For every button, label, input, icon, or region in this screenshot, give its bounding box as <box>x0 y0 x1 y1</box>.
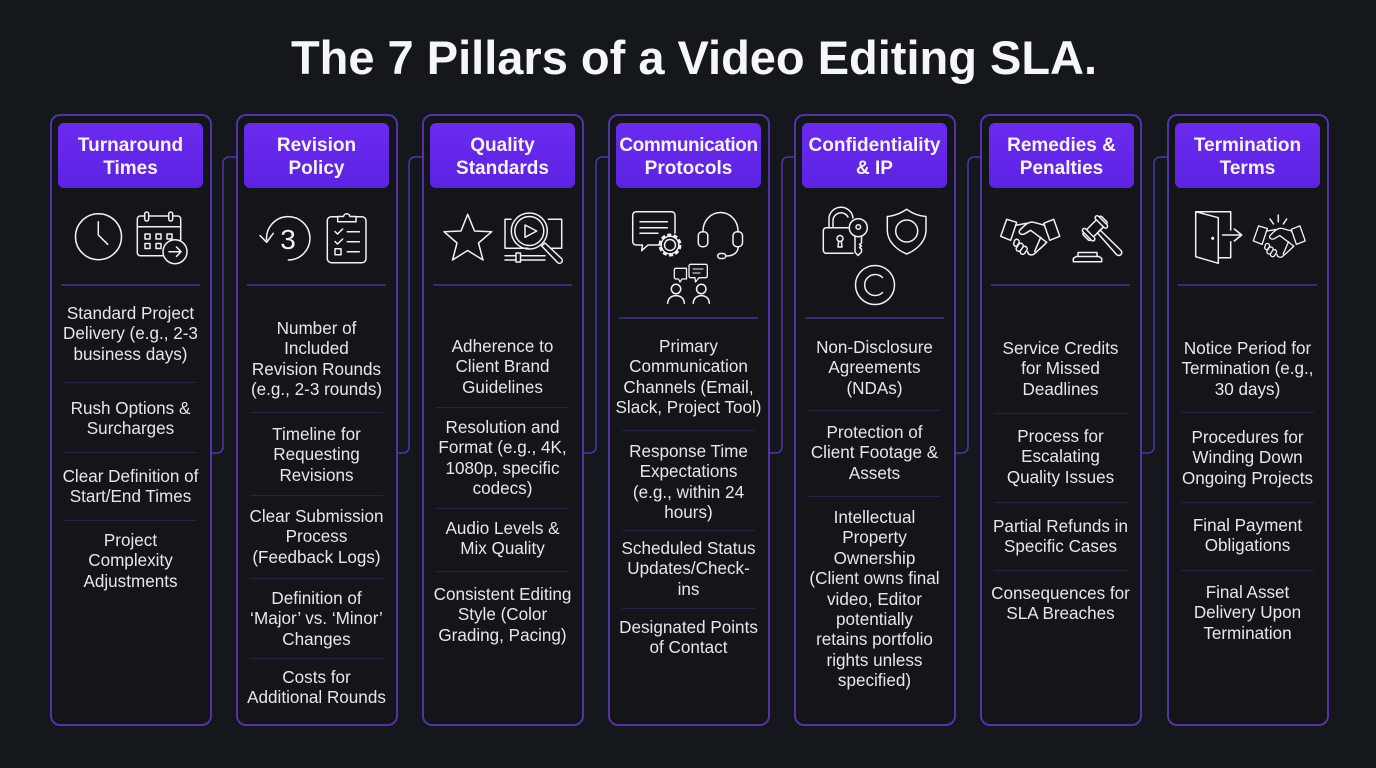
icon: gavel <box>1073 213 1122 262</box>
text: included rounds <box>251 319 382 399</box>
text: submission process: Clear Submission <box>250 507 383 526</box>
text: NDAs: (NDAs) <box>846 379 903 398</box>
text: final asset delivery <box>1194 583 1301 643</box>
text: IP ownership: specified) <box>838 671 911 690</box>
text: winding down: Ongoing Projects <box>1182 469 1313 488</box>
text: standard delivery: business days) <box>73 345 188 364</box>
text: notice period: 30 days) <box>1215 380 1280 399</box>
text: service credits <box>1003 339 1118 399</box>
text: final asset delivery: Termination <box>1203 624 1292 643</box>
text: points of contact: Designated Points <box>619 618 758 637</box>
heading: Remedies & Penalties: Remedies & <box>1007 135 1116 156</box>
panel: Communication Protocols <box>608 114 770 726</box>
heading: Quality Standards: Quality <box>470 135 535 156</box>
heading: Remedies & Penalties: Penalties <box>1020 158 1103 179</box>
text: final asset delivery: Final Asset <box>1206 583 1289 602</box>
text: complexity adjustments <box>83 531 178 591</box>
text: brand guidelines <box>452 337 553 397</box>
text: resolution and format: Resolution and <box>445 418 560 437</box>
text: final asset delivery: Delivery Upon <box>1194 603 1301 622</box>
text: NDAs: Non-Disclosure <box>816 338 933 357</box>
text: channels: Slack, Project Tool) <box>616 398 762 417</box>
icon: chat bubble with gear <box>633 212 680 255</box>
text: editing style: Style (Color <box>458 605 547 624</box>
heading: Termination Terms: Termination <box>1194 135 1301 156</box>
icons: star and video magnifier <box>443 212 563 264</box>
text: audio <box>445 519 560 558</box>
icon: clipboard checklist <box>327 214 366 263</box>
panel: Termination Terms <box>1167 114 1329 726</box>
icons: handshake and gavel <box>1000 215 1122 262</box>
icons: lock, shield, copyright <box>822 206 927 306</box>
title: The 7 Pillars of a Video Editing SLA. <box>291 31 1097 84</box>
text: timeline: Timeline for <box>272 425 361 444</box>
text: consequences <box>991 584 1130 623</box>
text: channels: Primary <box>659 337 718 356</box>
panel: Quality Standards <box>422 114 584 726</box>
heading: Confidentiality & IP: Confidentiality <box>809 135 940 156</box>
text: standard delivery: Delivery (e.g., 2-3 <box>63 324 198 343</box>
heading: Quality Standards: Standards <box>456 158 549 179</box>
text: footage protection <box>811 423 938 483</box>
text: IP ownership: Property <box>842 528 907 547</box>
text: escalation: Escalating <box>1021 447 1100 466</box>
text: final payment: Obligations <box>1205 536 1290 555</box>
heading: Revision Policy: Policy <box>288 158 344 179</box>
text: escalation: Process for <box>1017 427 1104 446</box>
text: resolution and format: codecs) <box>473 479 532 498</box>
text: brand guidelines: Adherence to <box>452 337 553 356</box>
text: response time: hours) <box>664 503 713 522</box>
text: status updates: Updates/Check- <box>627 559 750 578</box>
text: submission process <box>250 507 383 567</box>
heading: Termination Terms <box>1175 123 1320 188</box>
text: IP ownership: video, Editor <box>827 590 922 609</box>
text: major vs minor <box>250 589 383 649</box>
panel: Remedies & Penalties <box>980 114 1142 726</box>
text: notice period: Termination (e.g., <box>1181 359 1314 378</box>
text: winding down <box>1182 428 1313 488</box>
text: response time: (e.g., within 24 <box>633 483 744 502</box>
text: included rounds: Number of <box>277 319 356 338</box>
text: final payment <box>1193 516 1302 555</box>
text: channels: Communication <box>629 357 748 376</box>
text: footage protection: Client Footage & <box>811 443 938 462</box>
text: NDAs <box>816 338 933 398</box>
text: complexity adjustments: Adjustments <box>83 572 178 591</box>
text: resolution and format <box>438 418 567 498</box>
text: partial refunds: Partial Refunds in <box>993 517 1128 536</box>
icon: headset <box>698 212 742 258</box>
text: timeline: Requesting <box>273 445 360 464</box>
text: start and end times: Clear Definition of <box>63 467 198 486</box>
text: points of contact <box>619 618 758 657</box>
panel: Turnaround Times <box>50 114 212 726</box>
text: winding down: Procedures for <box>1191 428 1304 447</box>
text: IP ownership: retains portfolio <box>816 630 933 649</box>
text: brand guidelines: Guidelines <box>462 378 543 397</box>
text: response time: Expectations <box>640 462 737 481</box>
text: escalation: Quality Issues <box>1007 468 1114 487</box>
text: escalation <box>1007 427 1114 487</box>
text: submission process: (Feedback Logs) <box>252 548 381 567</box>
text: IP ownership <box>809 508 940 690</box>
text: standard delivery: Standard Project <box>67 304 194 323</box>
text: resolution and format: 1080p, specific <box>445 459 560 478</box>
text: costs: Additional Rounds <box>247 688 386 707</box>
icon: door with arrow <box>1196 212 1242 263</box>
text: final payment: Final Payment <box>1193 516 1302 535</box>
icon: handshake with sparkle <box>1253 215 1305 257</box>
text: rush options <box>71 399 190 438</box>
heading: Confidentiality & IP <box>802 123 947 188</box>
text: costs <box>247 668 386 707</box>
text: major vs minor: ‘Major’ vs. ‘Minor’ <box>250 609 383 628</box>
icon: clock <box>76 214 122 260</box>
icons: clock and calendar <box>74 211 188 264</box>
text: partial refunds: Specific Cases <box>1004 537 1117 556</box>
text: IP ownership: Ownership <box>834 549 915 568</box>
text: points of contact: of Contact <box>650 638 727 657</box>
icon: revision arrow with 3 <box>260 217 310 260</box>
heading: Remedies & Penalties <box>989 123 1134 188</box>
text: submission process: Process <box>286 527 347 546</box>
text: included rounds: Revision Rounds <box>252 360 381 379</box>
heading: Communication Protocols: Communication <box>619 135 758 156</box>
text: major vs minor: Definition of <box>271 589 362 608</box>
text: status updates: Scheduled Status <box>622 539 756 558</box>
text: service credits: for Missed <box>1021 359 1100 378</box>
text: IP ownership: potentially <box>836 610 913 629</box>
text: footage protection: Assets <box>849 464 900 483</box>
text: consequences: SLA Breaches <box>1006 604 1115 623</box>
text: start and end times <box>63 467 198 506</box>
text: IP ownership: rights unless <box>827 651 922 670</box>
text: winding down: Winding Down <box>1192 448 1303 467</box>
text: service credits: Deadlines <box>1022 380 1099 399</box>
text: IP ownership: (Client owns final <box>809 569 940 588</box>
text: resolution and format: Format (e.g., 4K, <box>438 438 567 457</box>
heading: Revision Policy <box>244 123 389 188</box>
icon: two people talking <box>668 264 709 303</box>
text: editing style: Consistent Editing <box>434 585 571 604</box>
heading: Communication Protocols <box>616 123 761 188</box>
text: editing style <box>434 585 571 645</box>
text: included rounds: (e.g., 2-3 rounds) <box>251 380 382 399</box>
icon: copyright <box>856 266 894 304</box>
text: NDAs: Agreements <box>828 358 921 377</box>
text: footage protection: Protection of <box>827 423 922 442</box>
text: rush options: Surcharges <box>87 419 174 438</box>
text: major vs minor: Changes <box>282 630 351 649</box>
heading: Communication Protocols: Protocols <box>645 158 732 179</box>
text: brand guidelines: Client Brand <box>455 357 550 376</box>
heading: Confidentiality & IP: & IP <box>856 158 893 179</box>
icon: revision arrow with 3: 3 <box>280 224 296 255</box>
heading: Turnaround Times <box>58 123 203 188</box>
text: response time: Response Time <box>629 442 748 461</box>
text: rush options: Rush Options & <box>71 399 190 418</box>
text: start and end times: Start/End Times <box>70 487 191 506</box>
text: service credits: Service Credits <box>1003 339 1118 358</box>
text: status updates <box>622 539 756 599</box>
text: complexity adjustments: Project <box>104 531 157 550</box>
heading: Quality Standards <box>430 123 575 188</box>
text: notice period <box>1181 339 1314 399</box>
text: timeline <box>272 425 361 485</box>
icons: exit door and handshake <box>1194 211 1306 264</box>
text: audio: Mix Quality <box>460 539 545 558</box>
text: response time <box>629 442 748 522</box>
panel: Confidentiality & IP <box>794 114 956 726</box>
text: editing style: Grading, Pacing) <box>438 626 567 645</box>
text: partial refunds <box>993 517 1128 556</box>
text: costs: Costs for <box>282 668 351 687</box>
heading: Revision Policy: Revision <box>277 135 356 156</box>
text: channels: Channels (Email, <box>623 378 754 397</box>
text: timeline: Revisions <box>279 466 354 485</box>
text: standard delivery <box>63 304 198 364</box>
panel: Revision Policy <box>236 114 398 726</box>
icons: chat, headset, people <box>632 211 744 304</box>
text: notice period: Notice Period for <box>1184 339 1311 358</box>
icon: shield <box>887 209 926 254</box>
icon: magnifier over video <box>505 213 562 263</box>
text: consequences: Consequences for <box>991 584 1130 603</box>
heading: Turnaround Times: Turnaround <box>78 135 183 156</box>
heading: Turnaround Times: Times <box>103 158 158 179</box>
text: status updates: ins <box>678 580 699 599</box>
icon: calendar with arrow <box>137 212 187 264</box>
icon: star <box>444 214 492 260</box>
text: channels <box>616 337 762 417</box>
icon: padlock with key <box>823 207 867 256</box>
text: audio: Audio Levels & <box>445 519 560 538</box>
text: complexity adjustments: Complexity <box>88 551 173 570</box>
icon: handshake <box>1001 219 1060 255</box>
text: included rounds: Included <box>284 339 349 358</box>
heading: Termination Terms: Terms <box>1220 158 1275 179</box>
icons: three revisions and checklist <box>259 213 367 264</box>
text: IP ownership: Intellectual <box>834 508 915 527</box>
